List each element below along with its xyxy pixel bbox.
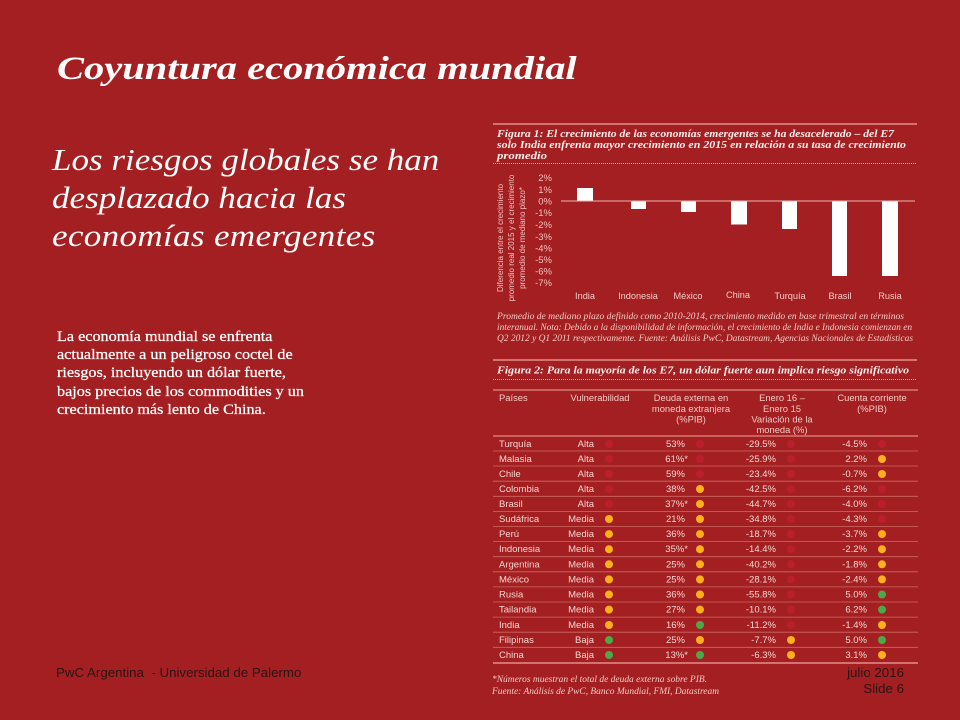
row: Tailandia bbox=[499, 605, 886, 616]
table header: Enero 16 – bbox=[759, 392, 806, 403]
subtitle: Los riesgos globales se han bbox=[52, 142, 439, 177]
title: Coyuntura económica mundial bbox=[57, 51, 577, 87]
row: Indonesia: -2.2% bbox=[842, 544, 868, 555]
row: India: India bbox=[499, 620, 520, 631]
table header: (%PIB) bbox=[857, 403, 887, 414]
row: Perú: 36% bbox=[666, 529, 686, 540]
row: China: -6.3% bbox=[751, 650, 777, 661]
bars bbox=[577, 188, 898, 276]
row: Filipinas: 5.0% bbox=[845, 635, 868, 646]
footer right: Slide 6 bbox=[863, 681, 904, 696]
category labels: Indonesia bbox=[618, 291, 659, 301]
subtitle: economías emergentes bbox=[52, 218, 376, 253]
figure 2 footnote bbox=[491, 675, 719, 697]
y axis title bbox=[496, 174, 527, 301]
row: Brasil: Brasil bbox=[499, 499, 523, 510]
figure 2 footnote: Fuente: Análisis de PwC, Banco Mundial, FMI, Datastream bbox=[491, 687, 719, 697]
table header: Países bbox=[499, 392, 528, 403]
row: Indonesia: Indonesia bbox=[499, 544, 541, 555]
row: Chile: Alta bbox=[578, 469, 595, 480]
row: Brasil: 37%* bbox=[665, 499, 688, 510]
row: Colombia: Colombia bbox=[499, 484, 540, 495]
row: Indonesia: Media bbox=[568, 544, 595, 555]
row: Indonesia bbox=[499, 544, 886, 555]
table header: Vulnerabilidad bbox=[570, 392, 630, 403]
row: Malasia: 61%* bbox=[665, 454, 688, 465]
row: India: 16% bbox=[666, 620, 686, 631]
subtitle bbox=[52, 142, 439, 253]
table header bbox=[493, 390, 918, 436]
table header: Variación de la bbox=[751, 414, 813, 424]
row: Filipinas: Baja bbox=[575, 635, 595, 646]
category labels: México bbox=[673, 291, 703, 301]
subtitle: desplazado hacia las bbox=[52, 180, 346, 215]
category labels: Turquía bbox=[774, 291, 807, 301]
row: Malasia: Alta bbox=[578, 454, 595, 465]
row: Perú: -3.7% bbox=[842, 529, 868, 540]
row: Sudáfrica: Media bbox=[568, 514, 595, 525]
row: Brasil: Alta bbox=[578, 499, 595, 510]
footer right bbox=[846, 665, 904, 696]
row: México: 25% bbox=[666, 574, 686, 585]
row: Filipinas: Filipinas bbox=[499, 635, 534, 646]
row: Turquía: Turquía bbox=[499, 439, 532, 450]
row: Argentina: 25% bbox=[666, 559, 686, 570]
category labels bbox=[575, 290, 903, 301]
row: Brasil: -4.0% bbox=[842, 499, 868, 510]
figure 2 footnote: *Números muestran el total de deuda externa sobre PIB. bbox=[492, 675, 707, 685]
row: Malasia: 2.2% bbox=[845, 454, 868, 465]
body text bbox=[56, 329, 304, 418]
bar chart: growth difference bbox=[496, 173, 915, 301]
category labels: India bbox=[575, 291, 596, 301]
body text: bajos precios de los commodities y un bbox=[57, 384, 304, 400]
y axis labels: 1% bbox=[538, 185, 553, 196]
body text: crecimiento más lento de China. bbox=[57, 402, 266, 418]
row: Perú: Perú bbox=[499, 529, 519, 540]
row: Brasil: -44.7% bbox=[746, 499, 777, 510]
row: Malasia: -25.9% bbox=[746, 454, 777, 465]
figure 1 note bbox=[496, 311, 913, 344]
row: Rusia: -55.8% bbox=[746, 590, 777, 600]
row: Tailandia: Tailandia bbox=[499, 605, 537, 616]
body text: actualmente a un peligroso coctel de bbox=[57, 347, 293, 363]
row: Sudáfrica: Sudáfrica bbox=[499, 514, 540, 525]
row: China bbox=[499, 650, 886, 661]
y axis title: promedio de mediano plazo* bbox=[518, 187, 527, 289]
row: India bbox=[499, 620, 886, 631]
row: Argentina: -1.8% bbox=[842, 559, 868, 570]
table header: moneda (%) bbox=[756, 424, 808, 435]
row: Colombia: -42.5% bbox=[746, 484, 777, 495]
row: Rusia bbox=[499, 590, 886, 600]
y axis labels: -4% bbox=[535, 244, 553, 254]
row: Chile bbox=[499, 469, 886, 480]
footer right: julio 2016 bbox=[847, 665, 904, 680]
row: Indonesia: -14.4% bbox=[746, 544, 777, 555]
row: Colombia: 38% bbox=[666, 484, 686, 495]
figure 1 note: Q2 2012 y Q1 2011 respectivamente. Fuente: Análisis PwC, Datastream, Agencias Nacionales de Estadísticas bbox=[497, 334, 913, 344]
row: Chile: 59% bbox=[666, 469, 686, 480]
row: Argentina: Argentina bbox=[499, 559, 540, 570]
row: India: -11.2% bbox=[747, 620, 777, 631]
row: Sudáfrica bbox=[499, 514, 886, 525]
y axis title: Diferencia entre el crecimiento bbox=[496, 183, 505, 292]
row: Brasil bbox=[499, 499, 886, 510]
row: China: China bbox=[499, 650, 525, 661]
row: Argentina: Media bbox=[568, 559, 595, 570]
row: Rusia: 5.0% bbox=[845, 590, 868, 600]
figure 1 heading: solo India enfrenta mayor crecimiento en 2015 en relación a su tasa de crecimiento bbox=[496, 140, 906, 151]
row: Malasia: Malasia bbox=[499, 454, 532, 465]
row: Filipinas: 25% bbox=[666, 635, 686, 646]
category labels: Rusia bbox=[878, 291, 903, 301]
y axis title: promedio real 2015 y el crecimiento bbox=[507, 174, 516, 301]
row: Argentina bbox=[499, 559, 886, 570]
y axis labels: 0% bbox=[538, 196, 553, 208]
row: Rusia: Rusia bbox=[499, 590, 524, 600]
y axis labels: -6% bbox=[535, 266, 553, 278]
row: Chile: -0.7% bbox=[842, 469, 868, 480]
row: México: México bbox=[499, 574, 529, 585]
category labels: China bbox=[726, 290, 751, 300]
row: México: -28.1% bbox=[746, 574, 777, 585]
row: India: -1.4% bbox=[842, 620, 868, 631]
row: Turquía: 53% bbox=[666, 439, 686, 450]
row: Sudáfrica: 21% bbox=[666, 514, 686, 525]
table header: moneda extranjera bbox=[652, 403, 731, 414]
body text: La economía mundial se enfrenta bbox=[57, 329, 272, 345]
y axis labels bbox=[535, 173, 553, 289]
figure 1 note: Promedio de mediano plazo definido como 2010-2014, crecimiento medido en base trimestral en términos bbox=[496, 311, 904, 322]
row: Sudáfrica: -4.3% bbox=[842, 514, 868, 525]
row: Filipinas bbox=[499, 635, 886, 646]
row: Tailandia: -10.1% bbox=[746, 605, 777, 616]
row: Tailandia: 6.2% bbox=[845, 605, 868, 616]
table header: (%PIB) bbox=[676, 414, 706, 424]
y axis labels: 2% bbox=[538, 173, 553, 184]
row: Chile: -23.4% bbox=[746, 469, 777, 480]
body text: riesgos, incluyendo un dólar fuerte, bbox=[57, 365, 286, 381]
row: China: 3.1% bbox=[845, 650, 868, 661]
row: Sudáfrica: -34.8% bbox=[746, 514, 777, 525]
y axis labels: -7% bbox=[535, 278, 553, 289]
y axis labels: -2% bbox=[535, 220, 553, 231]
row: Colombia: Alta bbox=[578, 484, 595, 495]
row: México bbox=[499, 574, 886, 585]
row: Filipinas: -7.7% bbox=[751, 635, 777, 646]
row: Turquía: -29.5% bbox=[746, 439, 777, 450]
y axis labels: -5% bbox=[535, 255, 553, 266]
y axis labels: -1% bbox=[535, 208, 553, 219]
row: Turquía: -4.5% bbox=[842, 439, 868, 450]
row: Argentina: -40.2% bbox=[746, 559, 777, 570]
figure 1 heading: Figura 1: El crecimiento de las economías emergentes se ha desacelerado – del E7 bbox=[496, 129, 895, 140]
row: India: Media bbox=[568, 620, 595, 631]
row: Perú: -18.7% bbox=[746, 529, 777, 540]
row: Rusia: 36% bbox=[666, 590, 686, 600]
row: Turquía bbox=[499, 439, 886, 450]
row: Turquía: Alta bbox=[578, 439, 595, 450]
table header: Deuda externa en bbox=[654, 392, 728, 403]
row: México: Media bbox=[568, 574, 595, 585]
row: Chile: Chile bbox=[499, 469, 521, 480]
figure 1 heading bbox=[493, 124, 917, 164]
footer left: PwC Argentina - Universidad de Palermo bbox=[56, 665, 301, 680]
row: China: 13%* bbox=[665, 650, 688, 661]
figure 1 heading: promedio bbox=[496, 151, 547, 162]
row: Tailandia: Media bbox=[568, 605, 595, 616]
row: Tailandia: 27% bbox=[666, 605, 686, 616]
figure 1 note: interanual. Nota: Debido a la disponibilidad de información, el crecimiento de India e Indonesia comienzan en bbox=[497, 322, 912, 333]
row: Colombia: -6.2% bbox=[842, 484, 868, 495]
figure 2 heading: Figura 2: Para la mayoría de los E7, un dólar fuerte aun implica riesgo significativo bbox=[496, 364, 910, 376]
row: China: Baja bbox=[575, 650, 595, 661]
row: México: -2.4% bbox=[842, 574, 868, 585]
row dividers bbox=[493, 451, 918, 663]
y axis labels: -3% bbox=[535, 232, 553, 243]
row: Perú bbox=[499, 529, 886, 540]
row: Colombia bbox=[499, 484, 886, 495]
row: Rusia: Media bbox=[568, 590, 595, 600]
table: E7 risk bbox=[493, 390, 918, 663]
row: Perú: Media bbox=[568, 529, 595, 540]
row: Indonesia: 35%* bbox=[665, 544, 688, 555]
category labels: Brasil bbox=[829, 291, 851, 301]
row: Malasia bbox=[499, 454, 886, 465]
table header: Enero 15 bbox=[763, 403, 801, 414]
table header: Cuenta corriente bbox=[837, 392, 907, 403]
